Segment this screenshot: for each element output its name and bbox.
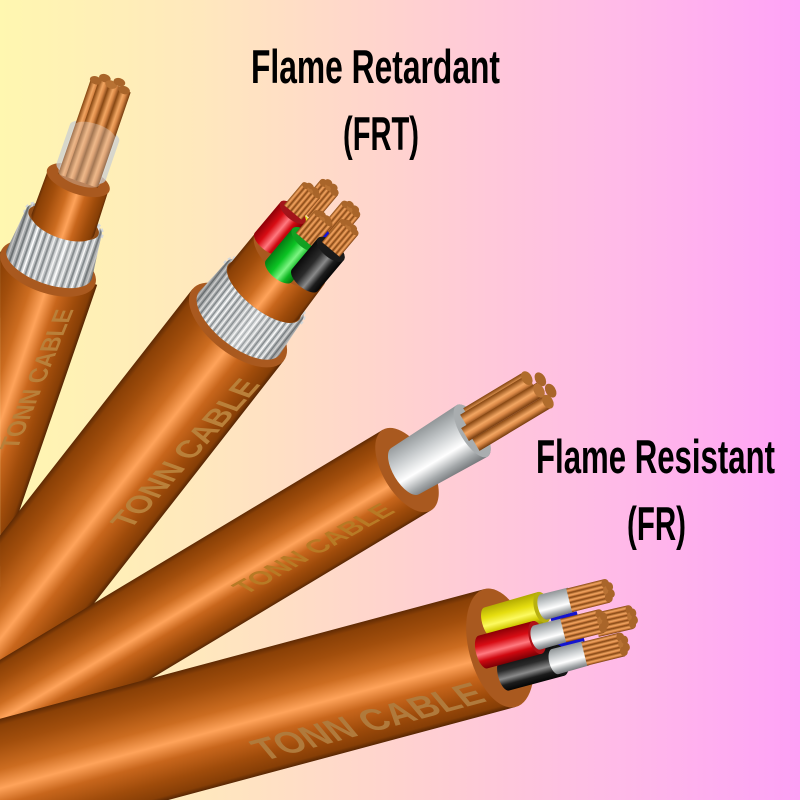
copper of rear core <box>593 604 640 637</box>
blue core of cable 4 <box>551 611 586 653</box>
inner orange sheath of cable 2 <box>218 217 336 333</box>
outer jacket of cable 4 <box>0 589 516 800</box>
red core <box>250 176 327 259</box>
armour wires of cable 2 <box>185 245 316 373</box>
cable 2 cores <box>250 175 366 297</box>
heading: Flame Retardant: Flame Retardant <box>251 40 500 93</box>
cable 4 print: TONN CABLE <box>244 677 493 767</box>
cable 4 cores <box>472 573 640 692</box>
jacket end face of cable 4 <box>454 581 546 715</box>
blue rear core of cable 2 <box>315 221 331 243</box>
outer jacket of cable 3 <box>0 430 431 769</box>
outer jacket of cable 1 <box>0 251 97 567</box>
jacket end face of cable 3 <box>362 417 452 523</box>
copper of rear blue core <box>320 197 364 243</box>
cable 4: multicore <box>0 581 546 800</box>
cable 2 print: TONN CABLE <box>103 374 268 532</box>
silver insulation of cable 3 <box>380 399 498 503</box>
copper of rear yellow core <box>297 175 342 223</box>
inner orange sheath of cable 1 <box>27 157 114 248</box>
heading: FRT: (FRT) <box>343 107 419 160</box>
sheath end face of cable 1 <box>43 156 114 204</box>
jacket end face of cable 2 <box>174 266 302 384</box>
outer jacket of cable 2 <box>0 289 284 724</box>
copper strands of cable 1 <box>57 69 134 188</box>
green core <box>261 203 340 288</box>
black core <box>494 626 633 692</box>
yellow core <box>478 573 618 639</box>
cable 2: armoured multicore <box>0 207 348 724</box>
black core <box>287 212 366 297</box>
grey insulation lobes of cable 1 <box>53 116 122 189</box>
armour wires of cable 1 <box>0 193 111 298</box>
cable 3 print: TONN CABLE <box>227 500 402 598</box>
translucent insulation of cable 1 <box>56 117 118 192</box>
cable 1: armoured single core, far left <box>0 60 163 567</box>
jacket end face of cable 1 <box>0 228 103 308</box>
red core <box>472 602 612 670</box>
heading: FR: (FR) <box>627 497 686 550</box>
copper strands of cable 3 <box>453 362 563 453</box>
cable 3: single core with silver insulation <box>0 343 576 769</box>
yellow rear core of cable 2 <box>302 215 313 230</box>
sheath end face of cable 2 <box>244 217 336 301</box>
